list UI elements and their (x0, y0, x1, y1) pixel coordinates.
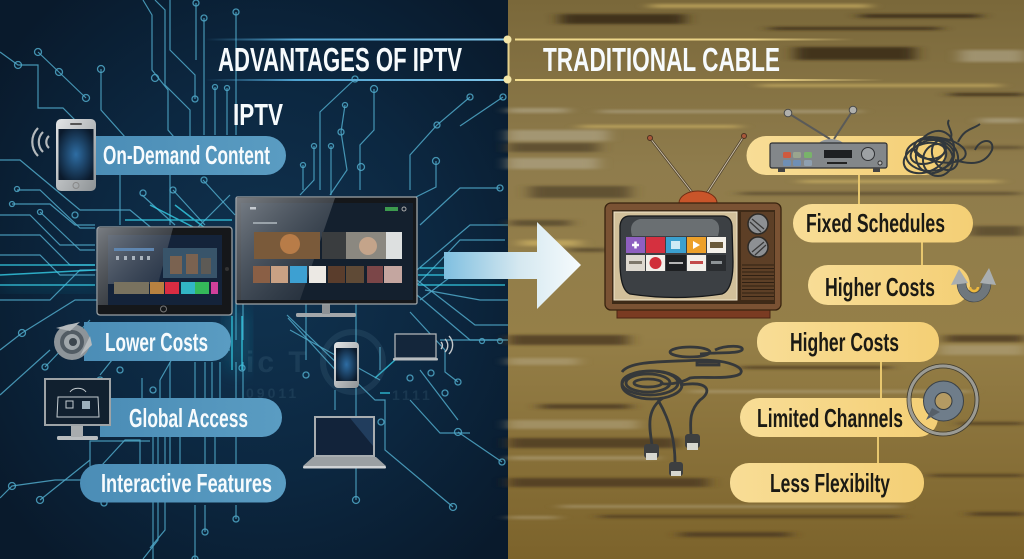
cyan glow traces (0, 205, 505, 393)
icon: small smartphone (334, 342, 359, 388)
retro television (605, 134, 781, 318)
connector line (859, 175, 922, 463)
pill: Less Flexibility: Less Flexibilty (770, 468, 890, 498)
title rule lines and nodes (205, 36, 885, 84)
pill: On-Demand Content (96, 136, 286, 175)
pill: Global Access: Global Access (129, 403, 248, 433)
pill: Global Access (100, 398, 282, 437)
icon: smartphone with signal (32, 119, 96, 191)
faint data text: 1111 (392, 387, 433, 403)
arrow: from IPTV to cable (444, 222, 581, 309)
faint data text: 09011 (246, 385, 299, 401)
pill: Fixed Schedules (793, 204, 973, 242)
pill: On-Demand Content: On-Demand Content (103, 140, 270, 170)
icon: tangled cable (900, 120, 992, 180)
heading: Traditional Cable: TRADITIONAL CABLE (543, 41, 780, 78)
panel: Traditional cable (right) (444, 0, 1024, 559)
pill: Limited Channels: Limited Channels (757, 403, 903, 433)
pill: Interactive Features: Interactive Features (101, 468, 272, 498)
icon: chat ring (907, 364, 979, 436)
pill: Higher Costs (upper): Higher Costs (825, 272, 935, 302)
icon: desktop monitor (45, 379, 110, 440)
heading: Advantages of IPTV: ADVANTAGES OF IPTV (218, 41, 462, 78)
IPTV subheading: IPTV (233, 97, 283, 132)
pill: Fixed Schedules: Fixed Schedules (806, 208, 945, 238)
pill: cable box (746, 106, 944, 175)
icon: cable set-top box (770, 106, 887, 172)
device: monitor with streaming UI (236, 197, 417, 317)
pill: Higher Costs (lower) (757, 322, 939, 362)
icon: laptop (303, 417, 386, 468)
icon: small laptop with signal (393, 334, 453, 360)
icon: coiled cables with connectors (622, 346, 742, 476)
pill: Higher Costs (lower): Higher Costs (790, 327, 899, 357)
pill: Interactive Features (80, 464, 286, 502)
pill: Limited Channels (740, 398, 938, 437)
icon: circular arrows (951, 268, 996, 302)
circuit node rings (8, 0, 506, 559)
pill: Higher Costs (upper) (808, 265, 970, 305)
device: tablet with streaming UI (97, 227, 232, 315)
icon: lower costs spiral (54, 322, 92, 360)
pill: Less Flexibility (730, 463, 924, 502)
background motion streaks (508, 4, 1024, 537)
circuit board pattern (0, 0, 508, 559)
pill: Lower Costs (84, 322, 231, 361)
panel: IPTV advantages (left) (0, 0, 508, 559)
faint data text (246, 332, 433, 403)
pill: Lower Costs: Lower Costs (105, 327, 208, 357)
faint data text: ic T (246, 346, 310, 379)
